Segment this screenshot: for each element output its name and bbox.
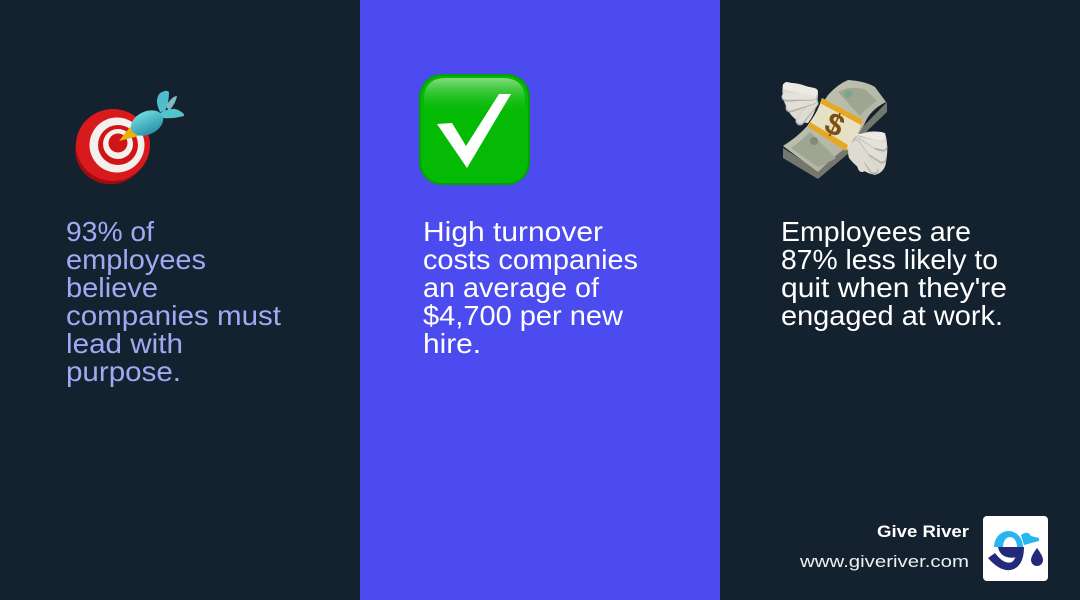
text: turnover stat: hire. (423, 328, 481, 359)
panel: left (0, 0, 360, 600)
text: engagement stat: 87% less likely to (781, 244, 998, 275)
icon: money with wings (782, 80, 887, 179)
text: engagement stat: Employees are (781, 216, 971, 247)
text: purpose stat: believe (66, 272, 158, 303)
text: purpose stat: 93% of (66, 216, 154, 247)
text: purpose stat: purpose. (66, 356, 181, 387)
text: turnover stat: High turnover (423, 216, 603, 247)
logo (983, 516, 1048, 581)
text: purpose stat (66, 216, 281, 387)
icon: dart hitting target (64, 91, 184, 196)
brand name: Give River (877, 522, 969, 541)
text: engagement stat: quit when they're (781, 272, 1007, 303)
text: engagement stat: engaged at work. (781, 300, 1003, 331)
panel: middle (360, 0, 720, 600)
text: turnover stat (423, 216, 638, 359)
icon: money with wings: $ (820, 105, 850, 144)
text: purpose stat: employees (66, 244, 206, 275)
text: turnover stat: costs companies (423, 244, 638, 275)
text: engagement stat (781, 216, 1007, 331)
text: purpose stat: lead with (66, 328, 183, 359)
icon: check mark button (419, 74, 530, 185)
website url: www.giveriver.com (799, 552, 969, 571)
text: turnover stat: $4,700 per new (423, 300, 624, 331)
text: turnover stat: an average of (423, 272, 599, 303)
text: purpose stat: companies must (66, 300, 281, 331)
panel: right (720, 0, 1080, 600)
